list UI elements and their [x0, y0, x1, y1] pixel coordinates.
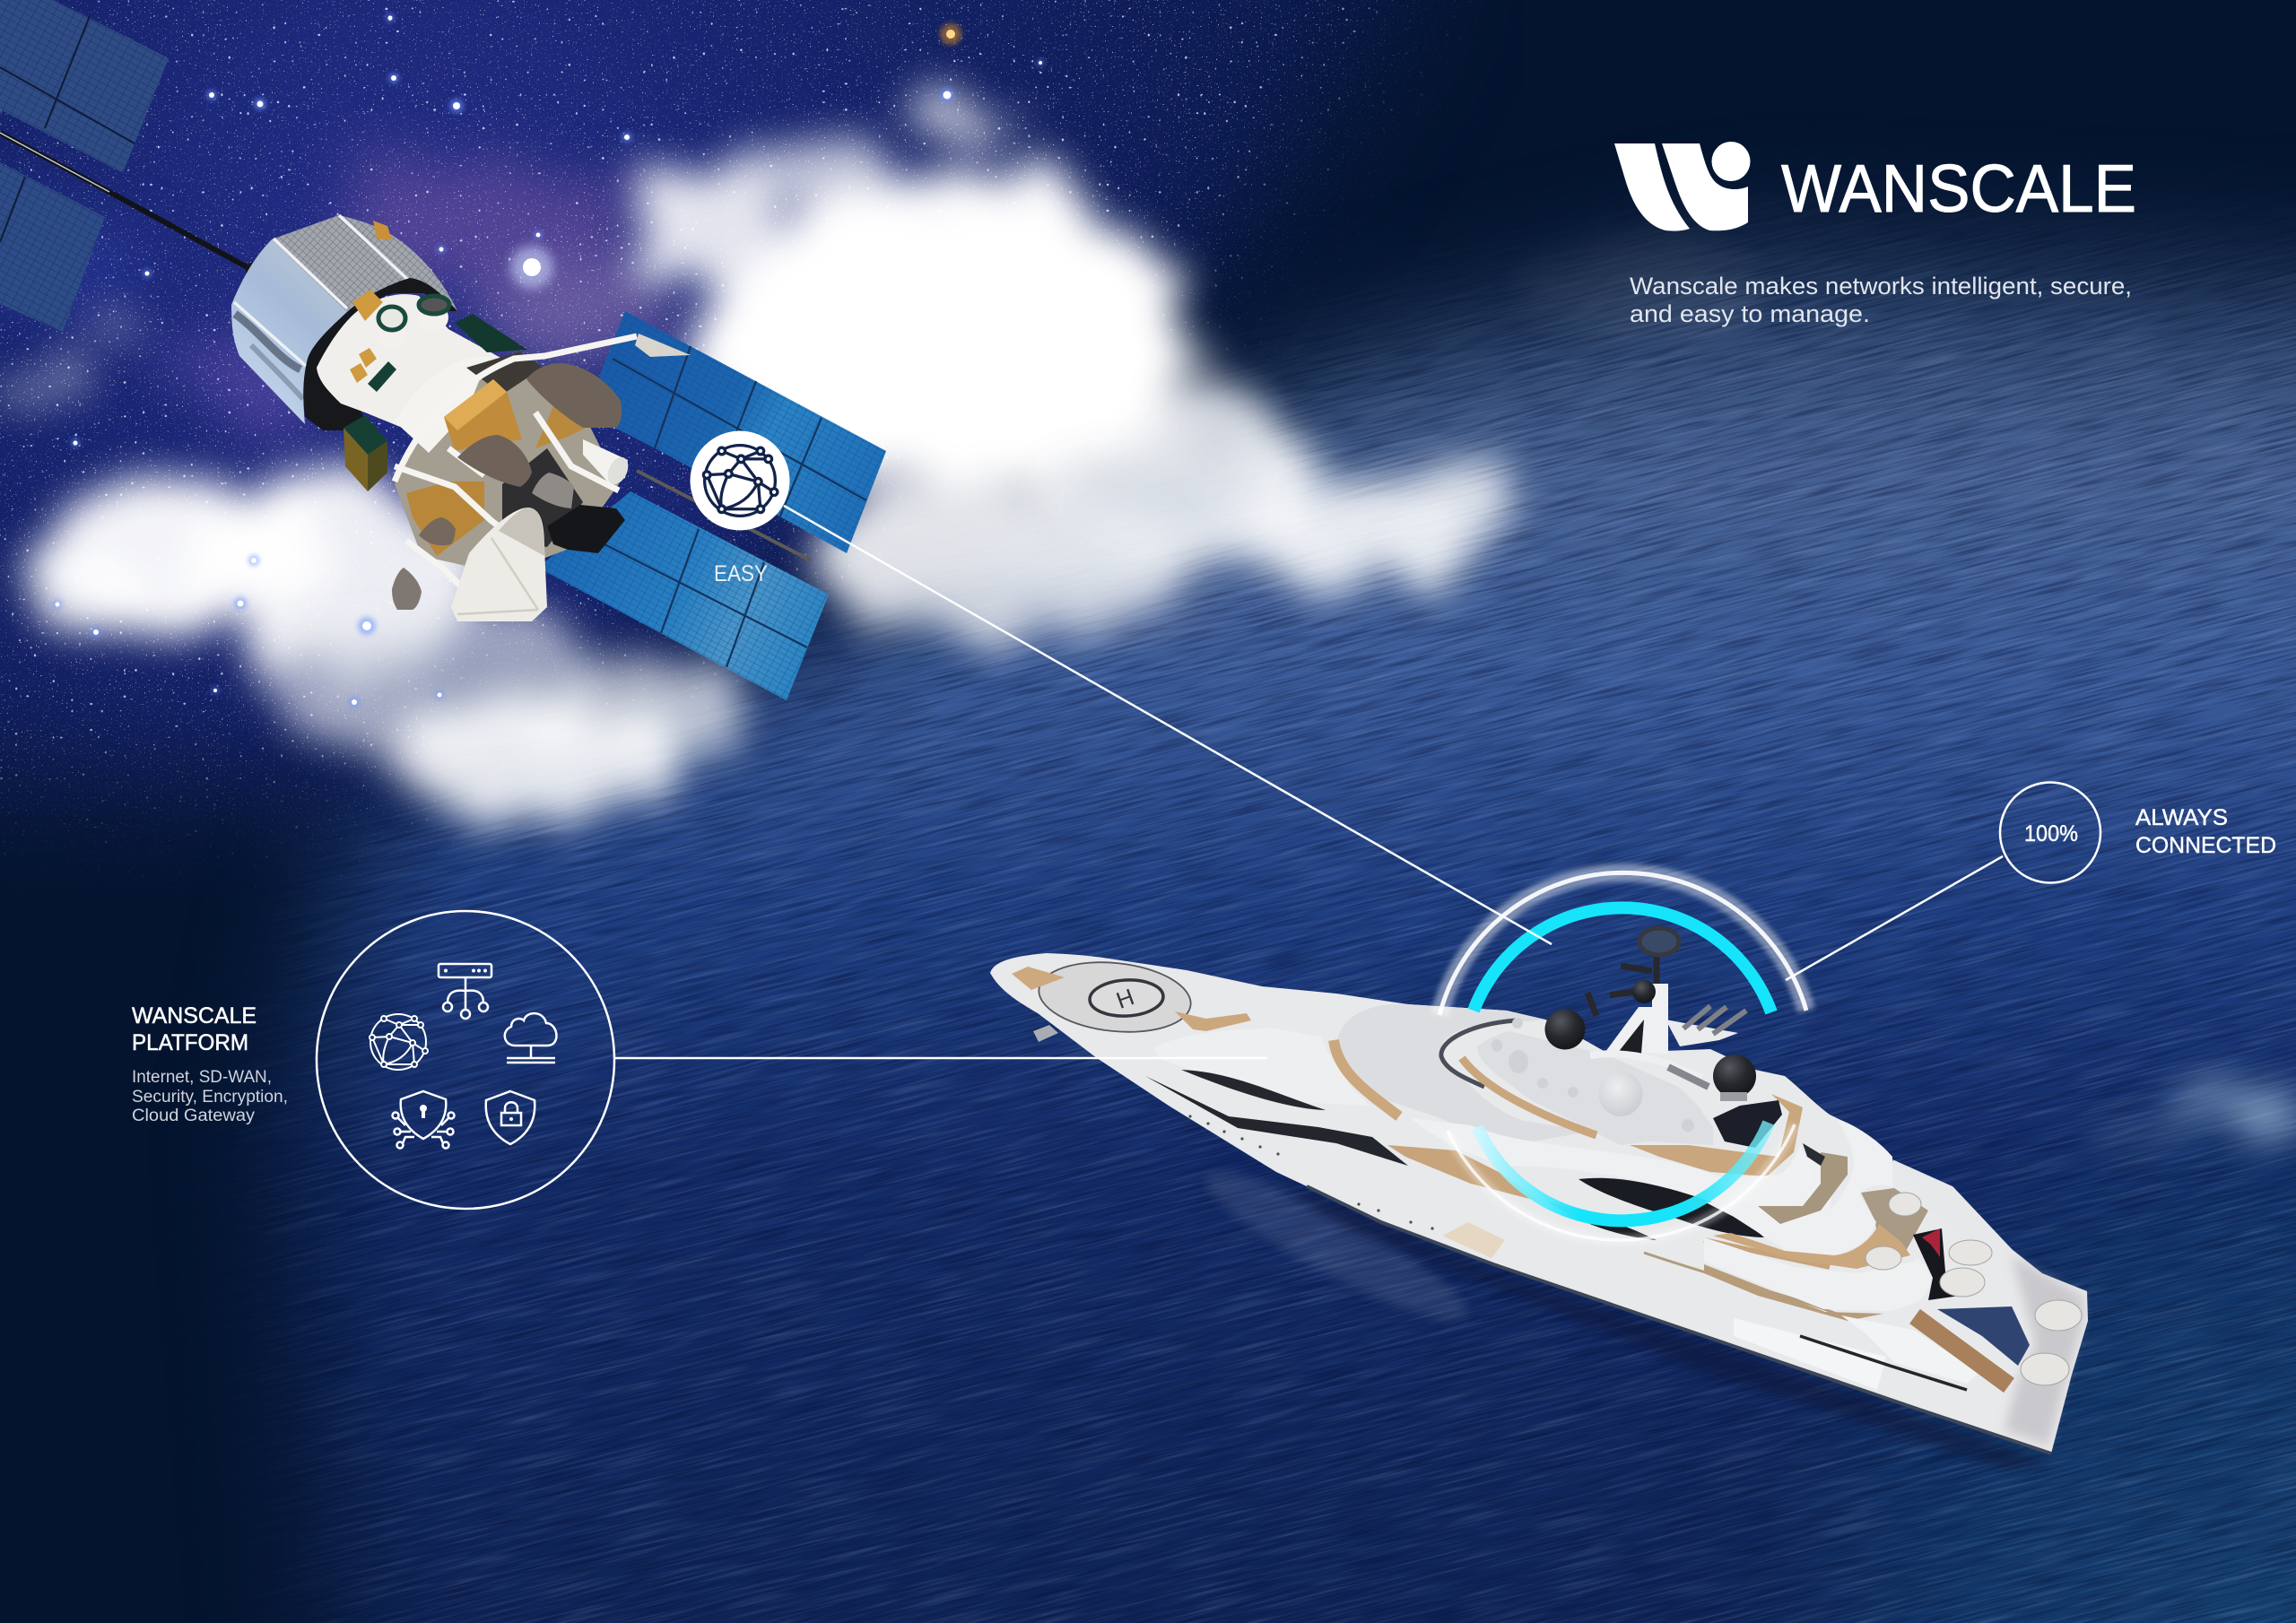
outer white arc glow [1439, 872, 1806, 1015]
clouds [0, 94, 2296, 1137]
tan stripe below lobe [1704, 1264, 1883, 1321]
feed horn [635, 334, 691, 357]
platform heading [132, 1003, 257, 1055]
label: easy: EASY [714, 561, 768, 586]
reflector dish [451, 508, 547, 621]
rim of top oval [1441, 1020, 1516, 1087]
platform description: Security, Encryption, [132, 1088, 288, 1107]
tagline: Wanscale makes networks intelligent, secure, [1630, 273, 2132, 299]
callout: 100% always connected: CONNECTED [2135, 833, 2276, 858]
tender boat [1033, 1025, 1058, 1042]
icon: globe network [370, 1014, 428, 1070]
aft dark glass [1803, 1143, 1825, 1166]
body interior [317, 294, 529, 502]
left solar panels [0, 0, 264, 332]
teak stairs [1915, 1316, 2009, 1385]
gold and green boxes [352, 290, 383, 321]
top tier deck [1477, 1031, 1713, 1145]
callout: 100% always connected: 100% [2024, 821, 2078, 846]
waterline [1307, 1186, 2051, 1454]
white radome [1598, 1072, 1643, 1116]
hull stripe [1644, 1253, 1848, 1318]
helipad [1035, 955, 1195, 1039]
side window band [1145, 1076, 1408, 1166]
foredeck lobe [1154, 1028, 1370, 1106]
white arc lower [1448, 1124, 1795, 1240]
platform description: Cloud Gateway [132, 1107, 256, 1125]
bright stars [53, 13, 1044, 707]
mast [1587, 928, 1679, 1054]
black radomes [1544, 980, 1756, 1101]
platform description [132, 1068, 288, 1125]
callout: 100% always connected: ALWAYS [2135, 805, 2228, 830]
bow deck seating [1012, 967, 1065, 990]
white feed cylinder [583, 439, 632, 488]
water reflection [1192, 1151, 1481, 1341]
tagline: and easy to manage. [1630, 300, 1870, 327]
hull base [990, 953, 2088, 1454]
solar panel wing upper [599, 311, 886, 553]
background: starry space with nebula [0, 0, 1525, 897]
second lobe [1704, 1118, 1892, 1255]
lower dark gap [1549, 1202, 1657, 1240]
connector: yacht to 100% circle [1786, 856, 2003, 980]
outer white arc [1439, 872, 1806, 1015]
tier two band [1411, 1118, 1831, 1240]
tan stripe forward [1704, 1240, 1830, 1267]
stern deck [1861, 1188, 1928, 1251]
solar panel wing lower [538, 491, 829, 700]
platform description: Internet, SD-WAN, [132, 1068, 272, 1087]
icon: easy globe badge [691, 430, 789, 531]
connector: satellite to yacht [784, 506, 1552, 944]
third lobe [1704, 1237, 1931, 1311]
hull shadow [1097, 1065, 2051, 1471]
main deck tier [1336, 1004, 1590, 1146]
brown thermal covers [392, 363, 622, 610]
yacht [990, 928, 2088, 1471]
black glass atrium [1713, 1100, 1782, 1148]
platform heading: WANSCALE [132, 1003, 257, 1028]
small domes [1492, 1018, 1694, 1132]
flag well [1913, 1228, 1960, 1300]
aft wing panels [1734, 1318, 1886, 1390]
connector: platform to yacht [614, 1057, 1267, 1059]
logo mark [1614, 142, 1751, 231]
antenna tubes [1590, 1006, 1746, 1087]
side hatch [1442, 1222, 1505, 1258]
cyan arc upper [1474, 907, 1771, 1012]
icon: shield with padlock [486, 1091, 535, 1144]
stern tint [2005, 1255, 2083, 1445]
tan aft deck [1713, 1224, 1910, 1269]
foredeck window [1181, 1070, 1326, 1110]
umbrellas [1866, 1193, 2082, 1385]
logo wordmark: WANSCALE [1781, 151, 2136, 226]
platform circle with icons [317, 911, 614, 1209]
tan side deck [1334, 1040, 1399, 1116]
cloud shading [278, 407, 1256, 697]
lower tan deck [1387, 1145, 1540, 1202]
upper lobe [1704, 1145, 1812, 1203]
tan oval deck [1462, 1058, 1596, 1135]
main dark window [1578, 1178, 1764, 1237]
callout: 100% always connected [2000, 782, 2276, 882]
right wing [1892, 1159, 2012, 1267]
satellite [0, 0, 886, 700]
tan floor under tier [1630, 1094, 1803, 1176]
icon: shield with circuit [393, 1091, 454, 1148]
white arc lower glow [1448, 1124, 1795, 1240]
signal arcs [1439, 872, 1806, 1240]
helipad letter: H [1113, 983, 1137, 1014]
rings and spheres [378, 317, 405, 350]
body cylinder [231, 215, 457, 424]
body opening rim [303, 278, 457, 430]
background: ocean surface with ripples [231, 193, 2296, 1623]
icon: cloud network [505, 1013, 556, 1063]
bus equipment [344, 290, 619, 574]
cyan arc lower [1477, 1123, 1769, 1220]
aft lobe interior floor [1758, 1152, 1848, 1224]
aft dark slit [1800, 1336, 1967, 1390]
white struts [395, 336, 637, 589]
stern pool [1937, 1306, 2030, 1366]
platform heading: PLATFORM [132, 1030, 248, 1055]
solar panel truss [637, 471, 811, 560]
portholes [1188, 1115, 1434, 1230]
flag [1922, 1228, 1940, 1257]
tagline [1630, 273, 2132, 327]
black sensor box [547, 505, 625, 553]
icon: server network [439, 964, 491, 1019]
